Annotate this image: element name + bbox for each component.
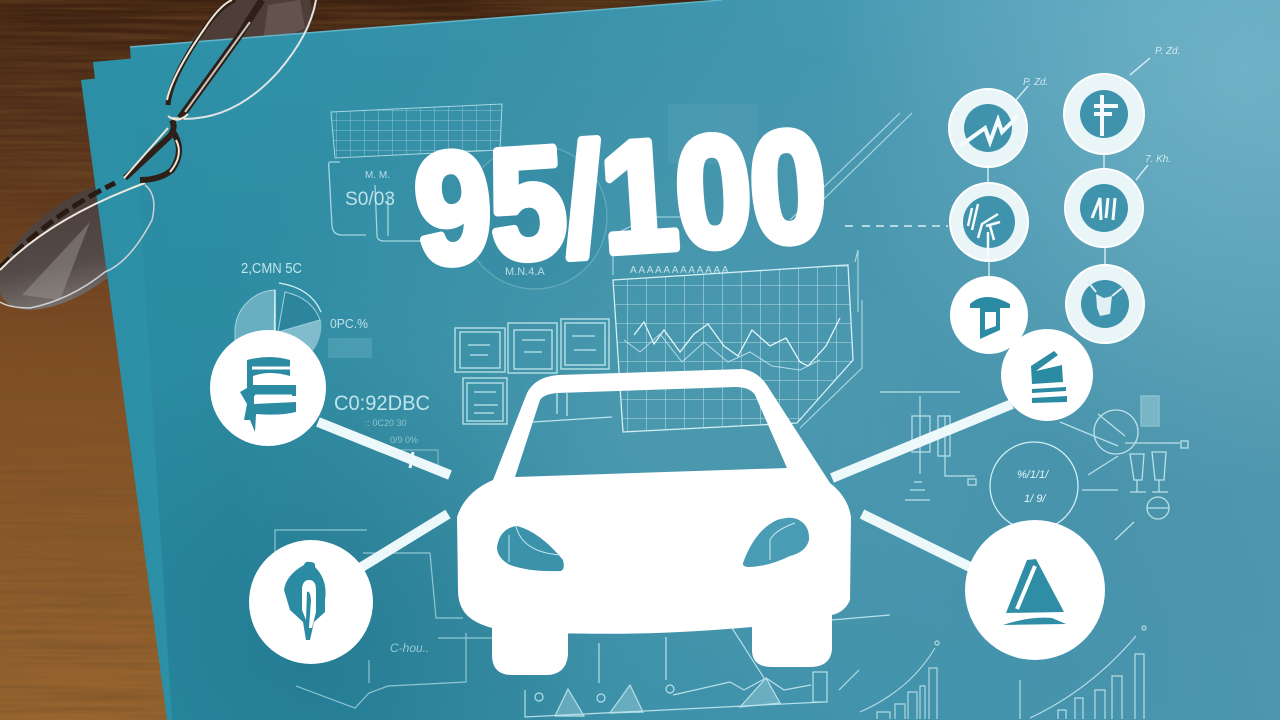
glasses lenses over wood: [0, 0, 335, 335]
icon: ring pylon: [1064, 74, 1144, 154]
icon: ring waves: [1065, 169, 1143, 247]
icon: warning triangle: [965, 520, 1105, 660]
blueprint: left bracket panel with reading: S0/03: [345, 189, 395, 210]
small print: :: 0C20 30: [365, 418, 407, 428]
lower-left note: C-hou..: [390, 641, 429, 655]
chart label: 0PC.%: [330, 316, 368, 331]
right tags: P. Zd.: [1155, 46, 1180, 57]
blueprint: diagonal double line: [668, 104, 948, 232]
small print: 0/9 0%: [390, 435, 418, 445]
icon: clip: [249, 540, 373, 664]
note block: [328, 338, 372, 358]
icon: stacked database: [210, 330, 326, 446]
middle sheet: [93, 42, 320, 720]
blueprint: instruments on right: [1060, 396, 1188, 540]
blueprint: small panel boxes: [455, 319, 612, 424]
right tags: [1016, 46, 1180, 180]
car silhouette: [457, 369, 851, 675]
blueprint: machine sketch: [880, 392, 976, 500]
blueprint: main grid chart: [613, 217, 862, 432]
blueprint: pie chart: [235, 283, 321, 352]
icon: stacked layers: [1001, 329, 1093, 421]
blueprint: top-left grid chart: [331, 104, 502, 158]
icon: ring chart line: [949, 89, 1027, 167]
score headline: 95/100: [410, 98, 830, 297]
chart label: 2,CMN 5C: [241, 260, 302, 277]
right tags: P. Zd.: [1023, 77, 1048, 88]
glasses frame: [0, 0, 316, 308]
connector arms: [318, 404, 1012, 568]
icon: ring shield: [1066, 265, 1144, 343]
blueprint: left bracket panel with reading: M. M.: [365, 170, 390, 181]
blueprint: round gauge with note: %/1/1/: [1017, 469, 1049, 481]
left headlight: [497, 526, 564, 571]
right headlight: [743, 518, 809, 567]
blueprint: round gauge with note: [990, 442, 1078, 530]
blueprint: main grid chart: A A A A A A A A A A A A: [630, 265, 729, 276]
icon: cup: [950, 276, 1028, 354]
blueprint: arc behind score: [463, 145, 607, 289]
blueprint: arc behind score: M.N.4.A: [505, 266, 545, 278]
blueprint: left bracket panel with reading: [329, 162, 420, 241]
right tags: 7. Kh.: [1145, 154, 1171, 165]
small print: [365, 418, 438, 465]
chart reading: C0:92DBC: [334, 392, 430, 415]
icon: ring strands: [950, 183, 1028, 262]
back sheet: [81, 66, 220, 720]
blueprint: right bar chart large: [1020, 626, 1146, 719]
connector lines between small icons: [988, 152, 1105, 276]
blueprint: round gauge with note: 1/ 9/: [1024, 493, 1046, 505]
blueprint: right bar chart small: [860, 641, 939, 719]
blueprint: lower-left panels: [275, 530, 492, 708]
blueprint: bottom centre mini charts: [525, 615, 890, 717]
